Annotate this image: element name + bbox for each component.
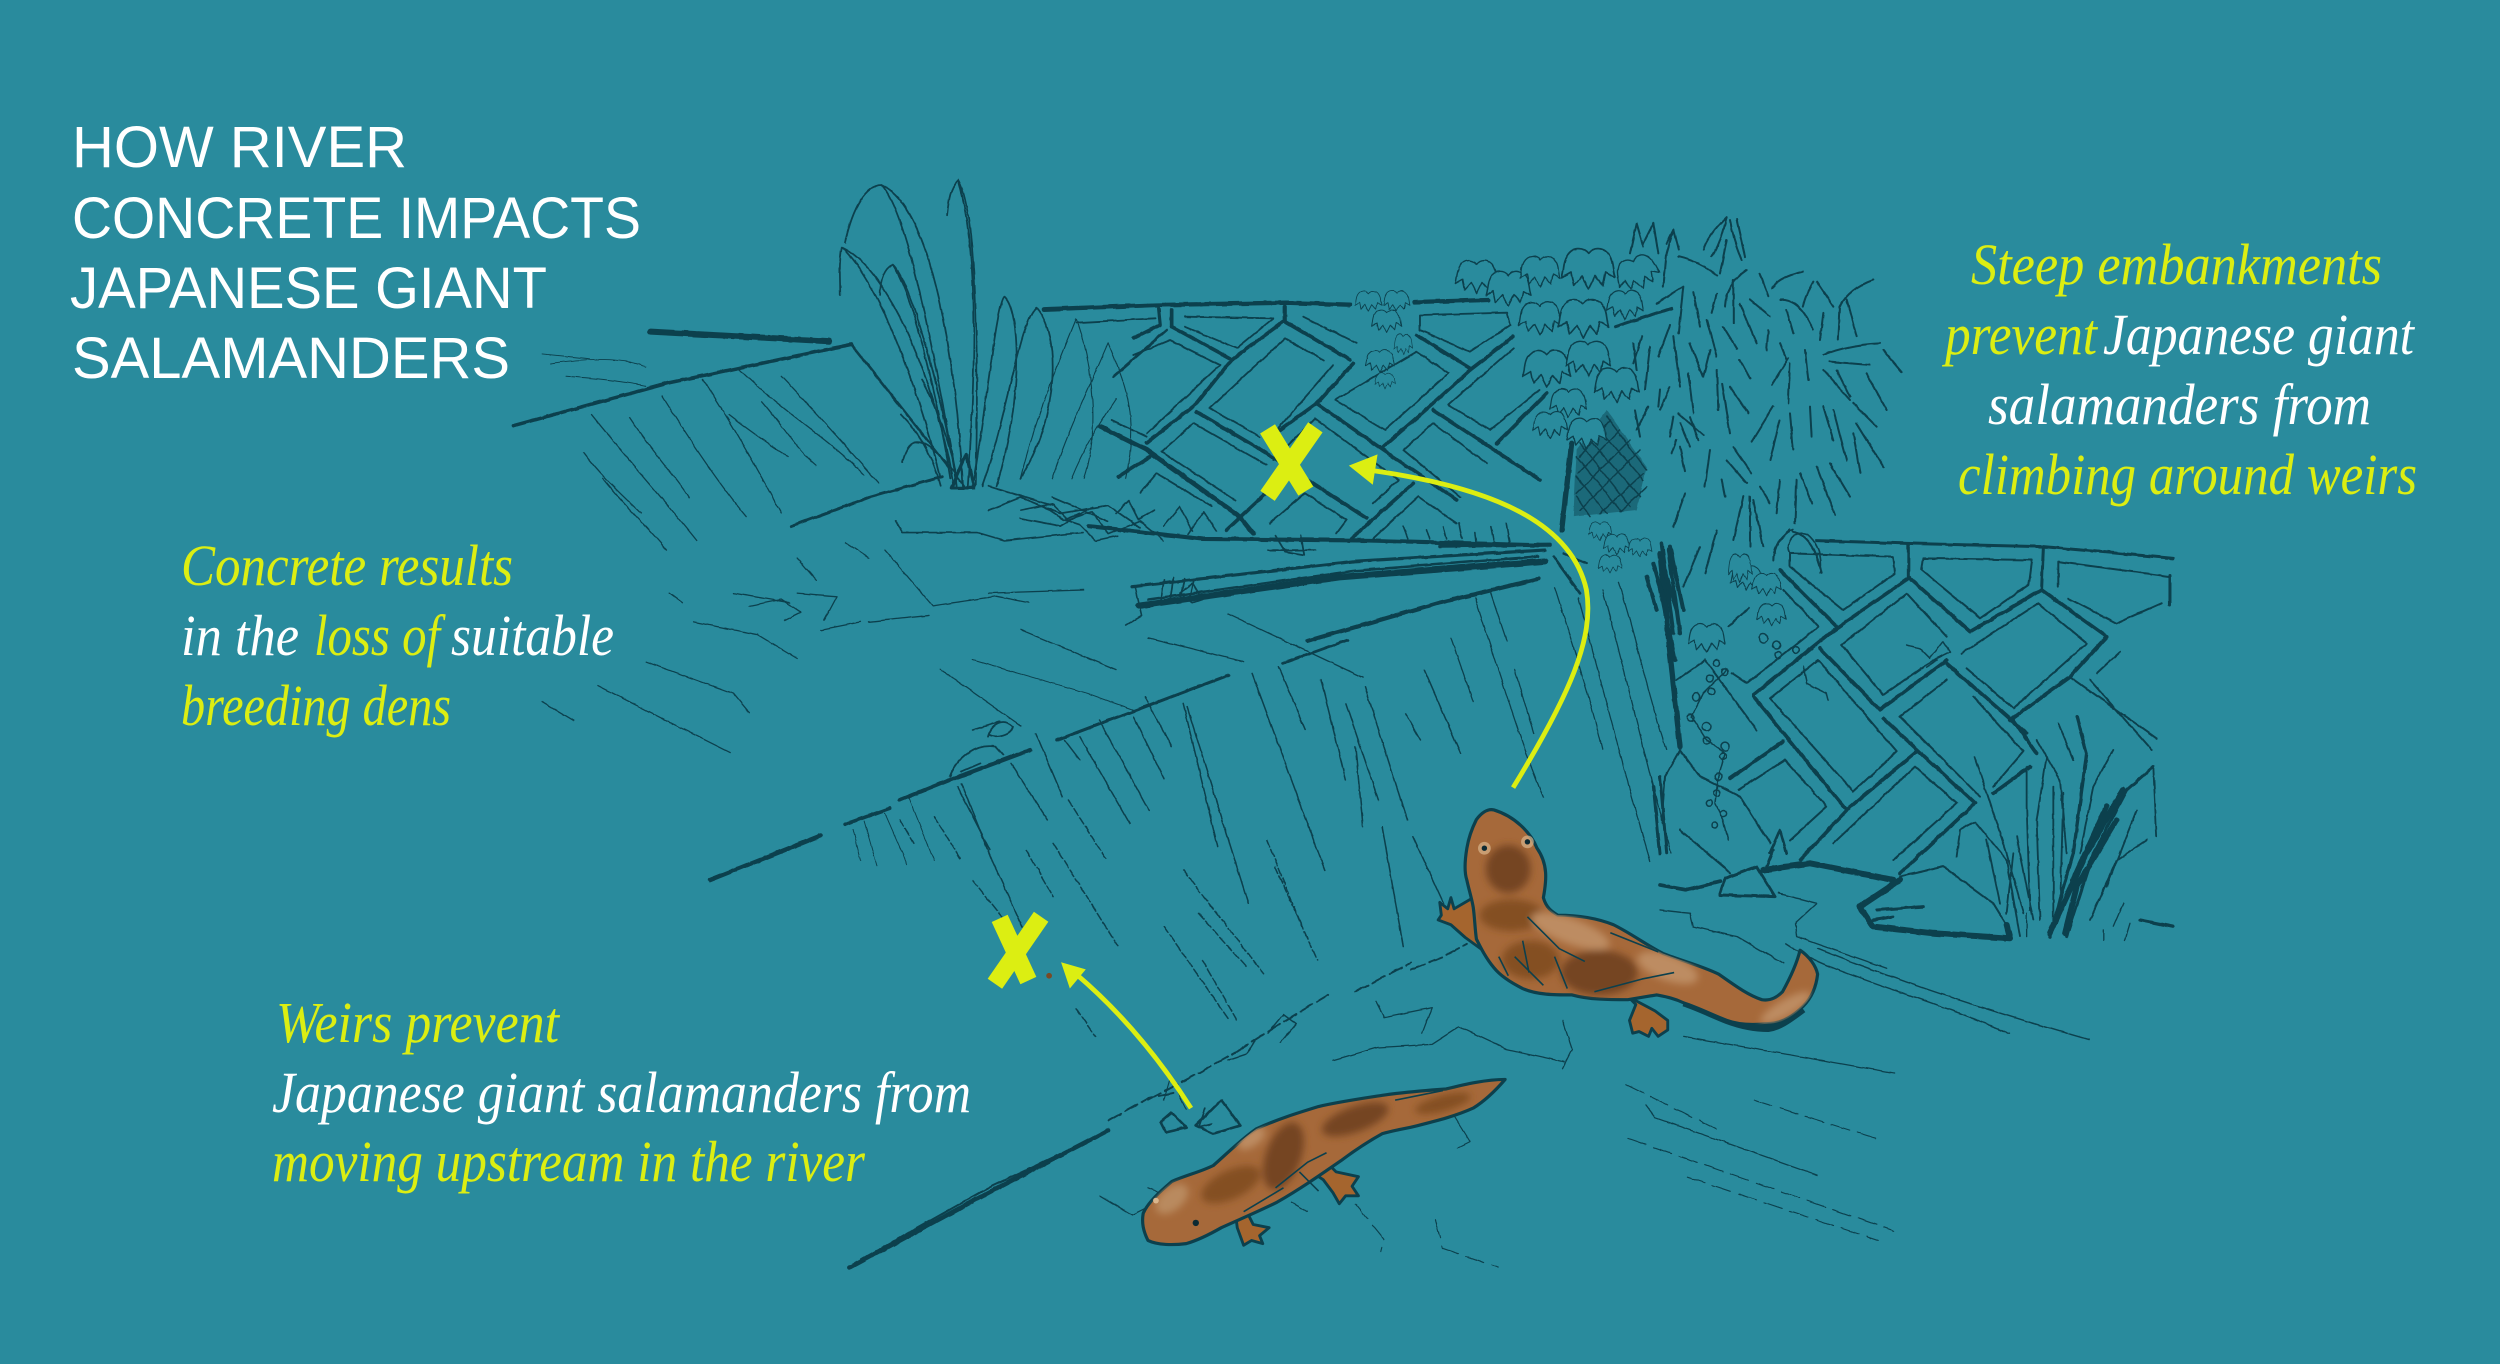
text: weirs prevent: moving upstream in the river	[272, 1129, 865, 1194]
hanging ivy cluster on fence	[1355, 291, 1413, 388]
upper lattice fence	[1043, 300, 1547, 538]
debris along upper ledge	[1020, 504, 1545, 625]
text: steep embankments: climbing around weirs	[1958, 442, 2417, 507]
text: steep embankments: prevent	[1941, 302, 2099, 367]
title	[70, 115, 641, 391]
rocks, ground and stream	[1653, 543, 2010, 968]
text: steep embankments	[1941, 232, 2417, 507]
text: steep embankments: salamanders from	[1988, 372, 2371, 437]
illustration: river weir sketch	[513, 180, 2173, 1268]
text: weirs prevent	[272, 990, 971, 1194]
left reeds plant	[840, 180, 1154, 528]
arrow: up the embankment	[1349, 454, 1588, 788]
ivy leaves	[1455, 249, 1763, 590]
text: steep embankments: Steep embankments	[1971, 232, 2382, 297]
upper floor detail lines	[542, 542, 1363, 753]
ivy leaves on right fence	[1688, 530, 1821, 653]
lower salamander	[1046, 973, 1505, 1245]
upper weir crest and bank	[513, 332, 1539, 550]
cross mark: embankment blocked	[1268, 427, 1315, 496]
text: concrete results: breeding dens	[181, 673, 451, 738]
title: HOW RIVER	[72, 115, 407, 180]
bamboo	[1615, 217, 1902, 587]
title: SALAMANDERS	[72, 326, 510, 391]
weir face hatching	[900, 640, 1461, 1037]
text: concrete results: suitable	[451, 603, 614, 668]
dark mesh behind ivy	[1440, 410, 1683, 610]
title: CONCRETE IMPACTS	[72, 186, 641, 251]
text: steep embankments: Japanese giant	[2103, 302, 2416, 367]
main weir crest	[710, 579, 1539, 880]
text: concrete results: Concrete results	[181, 533, 513, 598]
text: weirs prevent: Weirs prevent	[276, 990, 561, 1055]
salamanders	[1046, 810, 1818, 1245]
vine	[1687, 634, 1950, 840]
text: concrete results	[181, 533, 614, 738]
right lattice fence	[1677, 541, 2173, 873]
upper salamander	[1438, 810, 1818, 1036]
text: concrete results: loss of	[314, 603, 446, 668]
text: weirs prevent: Japanese giant salamanders from	[272, 1060, 971, 1125]
base of weir and floor lines	[850, 944, 2089, 1268]
arrow: up the weir	[1061, 962, 1191, 1108]
weir face hatching, east part	[853, 582, 1671, 866]
cross mark: weir blocked	[995, 917, 1041, 984]
title: JAPANESE GIANT	[70, 256, 547, 321]
right grass	[1957, 717, 2173, 940]
text: concrete results: in the	[181, 603, 299, 668]
